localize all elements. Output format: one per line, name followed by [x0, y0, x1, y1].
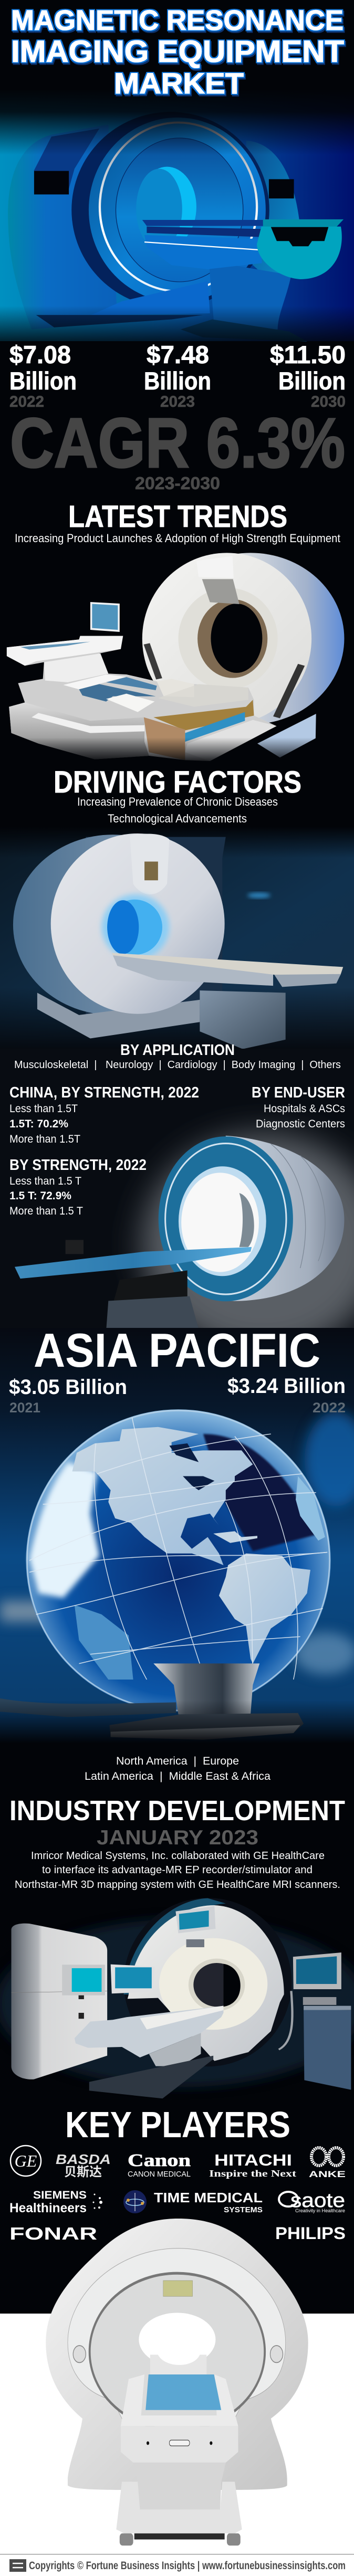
scanner shell	[46, 2219, 308, 2490]
stat: 2022 value	[9, 341, 77, 410]
panel: blue ring scanner	[15, 1136, 344, 1332]
text: china by strength: CHINA, BY STRENGTH, 2022	[9, 1084, 199, 1101]
logo: Canon: CANON MEDICAL	[128, 2170, 191, 2179]
logo: Canon: Canon	[128, 2151, 191, 2170]
scanner ring	[71, 112, 269, 308]
scanner inner ring	[90, 2273, 265, 2430]
fade under table	[0, 737, 354, 765]
pedestal	[111, 1270, 188, 1312]
heading: driving factors: DRIVING FACTORS	[54, 765, 301, 799]
logo: Siemens Healthineers	[9, 2189, 102, 2215]
scanner rear ring	[124, 1898, 291, 2066]
title: MAGNETIC RESONANCE	[11, 5, 343, 36]
panel: scanner room background	[0, 827, 354, 1050]
wall panel	[86, 837, 226, 1015]
stat: 2022 asia pacific: $3.24 Billion	[227, 1375, 346, 1398]
heading: development date: JANUARY 2023	[97, 1827, 258, 1849]
footer background	[0, 2314, 354, 2576]
stat: 2022 value: Billion	[9, 367, 77, 395]
background streaks	[0, 1412, 354, 1674]
land: south america	[219, 1554, 310, 1664]
scanner side	[13, 835, 213, 1015]
cabinet monitor	[62, 1965, 105, 1996]
text: other regions: Latin America | Middle East & Africa	[85, 1770, 270, 1782]
table rail	[113, 955, 273, 986]
logo: GE: GE	[15, 2151, 37, 2170]
table	[75, 2006, 224, 2057]
land: north america	[72, 1427, 253, 1565]
text: china by strength: 1.5T: 70.2%	[9, 1118, 68, 1130]
stat: 2030 value: 2030	[311, 393, 346, 410]
panel: MRI suite	[0, 1898, 354, 2098]
control screen	[144, 862, 158, 880]
heading: latest trends: LATEST TRENDS	[68, 500, 287, 534]
logo: Time Medical: TIME MEDICAL	[154, 2190, 263, 2205]
logo: Philips: PHILIPS	[275, 2224, 346, 2243]
scanner inner ring	[159, 1938, 267, 2030]
text: development detail: Imricor Medical Systems, Inc. collaborated with GE HealthCare	[31, 1850, 325, 1862]
monitor	[90, 602, 120, 632]
scanner back body	[246, 141, 300, 281]
scanner table	[142, 220, 264, 226]
scanner bore	[197, 599, 267, 678]
heading: by application: BY APPLICATION	[120, 1042, 235, 1059]
text: development detail: Northstar-MR 3D mapping system with GE HealthCare MRI scanners.	[15, 1879, 340, 1891]
panel: globe	[26, 1409, 331, 1712]
top notch and display	[196, 556, 234, 578]
cabinet	[11, 1924, 107, 2079]
scanner bore	[193, 1963, 240, 2007]
logo: Esaote	[279, 2190, 345, 2213]
text: application segments: Musculoskeletal | Neurology | Cardiology | Body Imaging | Others	[14, 1059, 341, 1071]
land: africa edge	[296, 1476, 325, 1540]
logo: Hitachi: Inspire the Next	[209, 2168, 296, 2179]
room fade	[0, 827, 354, 1050]
scanner face	[51, 833, 225, 1014]
text: china by strength	[9, 1084, 199, 1145]
blue mattress	[145, 2374, 221, 2410]
scanner front face	[142, 553, 311, 724]
logo: Esaote: saote	[290, 2190, 345, 2212]
scanner body	[128, 1905, 284, 2061]
white bore	[181, 1173, 259, 1272]
text: by end-user: Diagnostic Centers	[256, 1118, 345, 1130]
CAGR period: 2023-2030	[135, 473, 220, 493]
logo: Fonar: FONAR	[9, 2224, 97, 2243]
scanner base	[37, 993, 200, 1039]
stat: 2030 value	[270, 341, 346, 410]
yellow display	[163, 2281, 193, 2296]
panel: scanner with blue bore	[13, 833, 343, 1049]
left highlight	[29, 1462, 99, 1598]
stat: 2023 value: 2023	[160, 393, 195, 410]
globe stand	[0, 1663, 304, 1740]
logo: Time Medical	[123, 2190, 263, 2214]
text: driving factor two: Technological Advancements	[108, 812, 247, 825]
side monitor	[293, 1952, 341, 1989]
table base	[116, 2482, 242, 2533]
lab light	[142, 1134, 354, 1354]
table silhouette	[7, 636, 277, 761]
logo: BASDA	[56, 2151, 111, 2179]
scanner bore	[138, 167, 196, 247]
text: by end-user: Hospitals & ASCs	[264, 1103, 345, 1115]
panel: white scanner front view	[46, 2219, 308, 2546]
top monitor	[175, 1906, 215, 1933]
text: development detail	[15, 1850, 340, 1891]
text: by strength	[9, 1157, 147, 1217]
text: by strength: BY STRENGTH, 2022	[9, 1157, 147, 1174]
cable	[279, 1991, 293, 2050]
text: development detail: to interface its advantage-MR EP recorder/stimulator and	[42, 1864, 313, 1876]
globe grid lines	[29, 1418, 327, 1680]
globe section fade	[0, 1701, 354, 1744]
top panel	[130, 834, 169, 894]
panel: scanner lab background	[0, 1049, 354, 1343]
head rest	[150, 2355, 206, 2374]
table column	[133, 2463, 226, 2510]
scanner bore	[139, 2313, 215, 2366]
table rails	[121, 2374, 238, 2426]
title: MARKET	[114, 67, 244, 100]
scanner left body	[8, 124, 117, 330]
logo: Siemens Healthineers: Healthineers	[9, 2201, 87, 2215]
logo: Hitachi	[209, 2151, 296, 2179]
stat: 2021 asia pacific: 2021	[9, 1400, 40, 1416]
logo: BASDA: BASDA	[56, 2151, 111, 2167]
table top	[112, 953, 343, 975]
logo: Time Medical: SYSTEMS	[224, 2205, 263, 2214]
table front	[121, 2426, 238, 2463]
stat: 2022 asia pacific: 2022	[313, 1400, 346, 1416]
text: by end-user: BY END-USER	[252, 1084, 345, 1101]
cart	[304, 2006, 351, 2090]
dark upper right	[203, 1434, 316, 1551]
side device	[303, 1997, 336, 2005]
small equipment	[186, 1939, 204, 1947]
stat: 2030 value: $11.50	[270, 341, 346, 368]
blue ring	[159, 1136, 293, 1301]
text: by strength: Less than 1.5 T	[9, 1175, 81, 1187]
stat: 2022 value: 2022	[9, 393, 44, 410]
side grilles	[147, 644, 159, 679]
text: china by strength: More than 1.5T	[9, 1133, 80, 1145]
stat: 2023 value: Billion	[144, 367, 211, 395]
heading: asia pacific: ASIA PACIFIC	[34, 1324, 320, 1377]
pedestal	[200, 990, 286, 1049]
text: by strength: More than 1.5 T	[9, 1205, 83, 1217]
logo: Anke: ANKE	[309, 2169, 346, 2179]
cutaway block	[153, 700, 254, 731]
logo: GE	[11, 2146, 41, 2176]
side knobs	[73, 2346, 283, 2362]
land: lower left	[75, 1605, 133, 1680]
black screens	[34, 171, 69, 194]
scanner support pedestal	[209, 261, 291, 330]
cabinet vents	[79, 1996, 84, 2019]
logo: BASDA: 贝斯达	[64, 2165, 102, 2179]
wheels	[120, 2533, 241, 2546]
dark room glow	[0, 1919, 354, 2087]
teal table cover	[263, 219, 343, 227]
text: other regions	[85, 1755, 270, 1782]
land: caribbean	[213, 1531, 257, 1543]
panel: hero MRI scanner	[0, 89, 354, 342]
logo: Canon	[128, 2151, 191, 2179]
table pedestal	[149, 2033, 201, 2066]
logo: Esaote: Creativity in Healthcare	[295, 2208, 345, 2213]
panel: white scanner with table	[7, 553, 344, 761]
table	[15, 1247, 252, 1279]
footer logo	[9, 2559, 26, 2572]
table column	[44, 653, 108, 682]
bore glow	[101, 894, 169, 960]
table mattress	[79, 684, 156, 702]
globe sphere	[26, 1409, 331, 1712]
floor plate	[89, 2056, 213, 2098]
stat: 2021 asia pacific: $3.05 Billion	[9, 1376, 127, 1399]
heading: key players: KEY PLAYERS	[65, 2104, 290, 2145]
middle monitor	[111, 1965, 154, 1993]
panel: globe background	[0, 1328, 354, 1743]
title: IMAGING EQUIPMENT	[11, 35, 344, 69]
front platform	[185, 720, 277, 761]
table top	[7, 636, 123, 666]
logo: Anke	[309, 2148, 346, 2179]
title	[11, 5, 344, 100]
text: by end-user	[252, 1084, 345, 1130]
table base	[9, 702, 149, 759]
great lakes	[169, 1443, 214, 1490]
scanner body	[226, 1136, 344, 1301]
logo: Hitachi: HITACHI	[214, 2151, 292, 2169]
stat: 2023 value	[144, 341, 211, 410]
logo: Siemens Healthineers: SIEMENS	[33, 2189, 87, 2201]
text: driving factor one: Increasing Prevalence of Chronic Diseases	[77, 795, 278, 808]
scanner foot	[36, 315, 203, 328]
stat: 2022 asia pacific	[227, 1375, 346, 1416]
text: by strength: 1.5 T: 72.9%	[9, 1190, 71, 1202]
room light	[247, 893, 270, 898]
text: china by strength: Less than 1.5T	[9, 1103, 78, 1115]
text: other regions: North America | Europe	[116, 1755, 239, 1767]
scanner back	[157, 553, 344, 724]
stat: 2023 value: $7.48	[147, 341, 209, 368]
stat: 2030 value: Billion	[278, 367, 346, 395]
stat: 2022 value: $7.08	[9, 341, 71, 368]
stat: 2021 asia pacific	[9, 1376, 127, 1416]
